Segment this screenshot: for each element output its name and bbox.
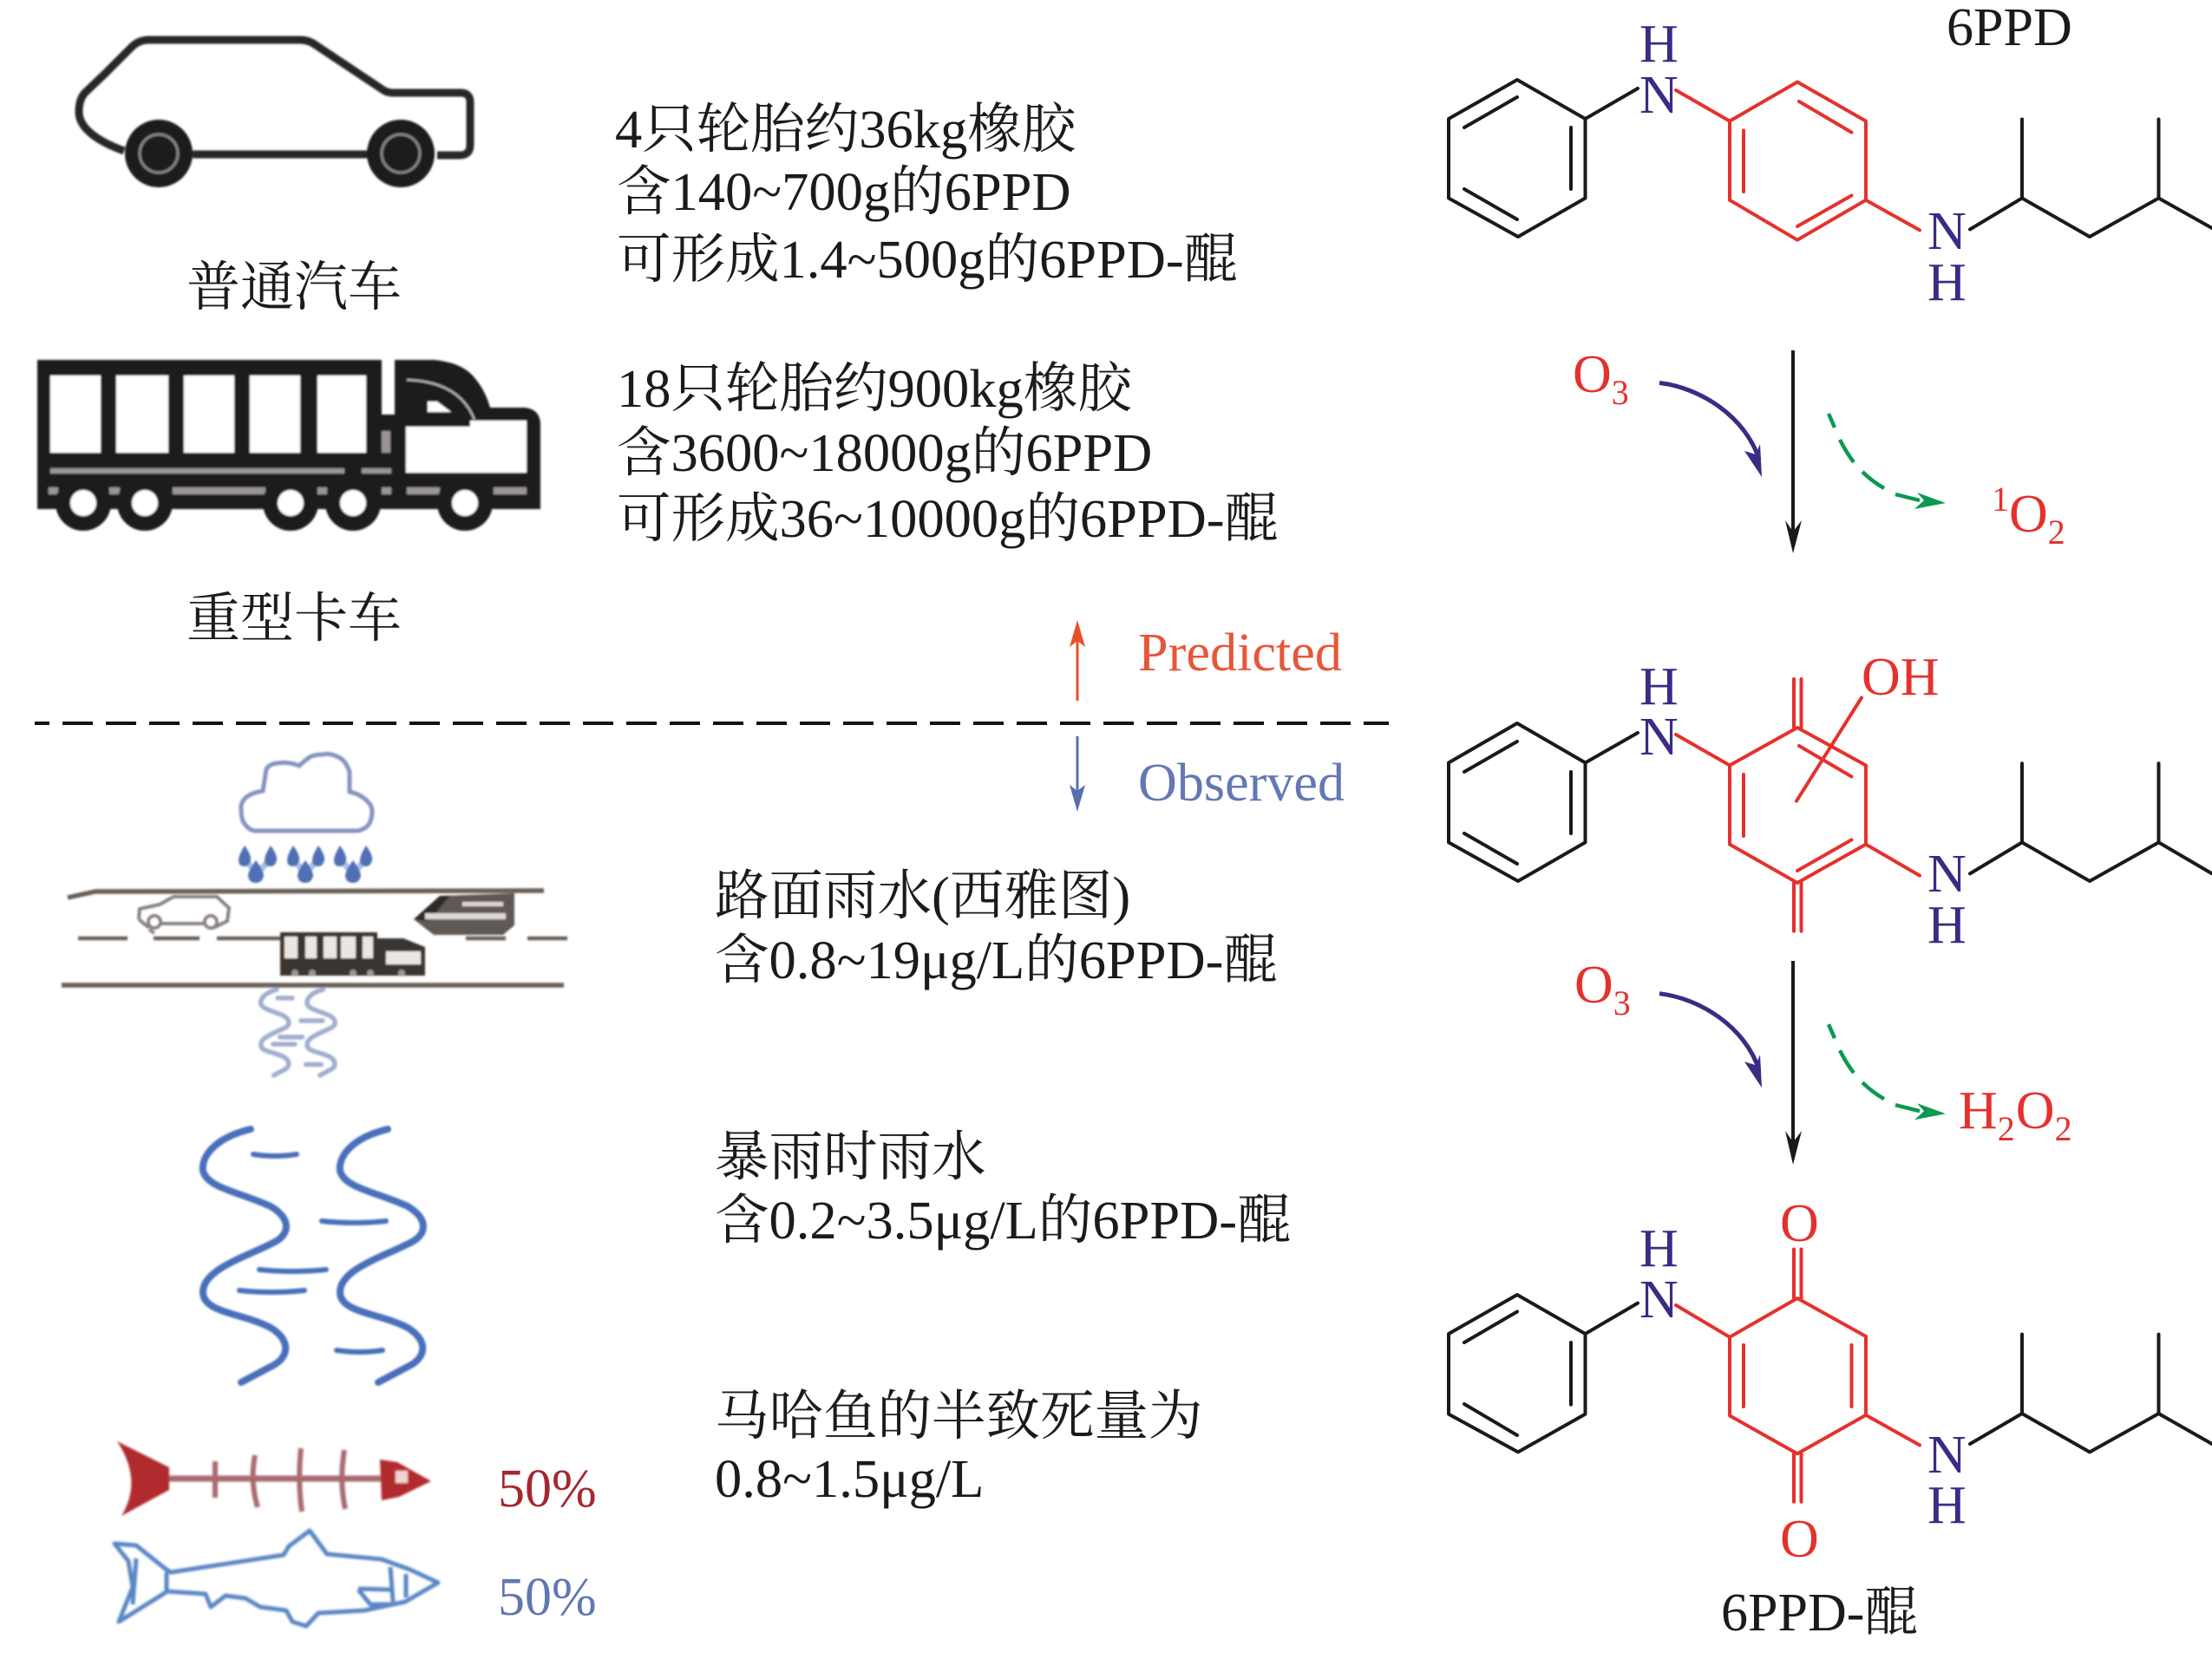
molecule: 6PPD: N — [1639, 66, 1679, 125]
molecule: 6PPD-quinone: H — [1927, 1476, 1967, 1535]
arrow: ozone in — [1659, 994, 1762, 1087]
icon: rain on road with runoff — [62, 754, 567, 1075]
icon: small truck — [280, 932, 425, 976]
icon: rain drops — [239, 846, 372, 883]
text block: truck tyres: 可形成36~10000g的6PPD-醌 — [617, 488, 1279, 549]
icon: stormwater streams — [203, 1129, 423, 1382]
icon: heavy truck — [37, 360, 540, 531]
label: ozone: 3 — [1613, 983, 1631, 1022]
molecule: hydroxylated intermediate: N — [1927, 845, 1967, 904]
text block: storm water: 暴雨时雨水 — [715, 1127, 985, 1187]
arrow: singlet oxygen out — [1829, 414, 1946, 509]
text block: road runoff: 路面雨水(西雅图) — [715, 865, 1130, 926]
label: hydrogen peroxide: H — [1959, 1081, 1998, 1140]
label: ozone: 3 — [1612, 373, 1629, 412]
label: observed: Observed — [1138, 754, 1345, 813]
molecule: hydroxylated intermediate — [1449, 648, 2212, 955]
label: hydroxyl: OH — [1862, 648, 1940, 707]
icon: small SUV — [414, 893, 514, 935]
molecule: 6PPD-quinone: O — [1780, 1194, 1819, 1253]
label: singlet oxygen: 1 — [1992, 480, 2009, 519]
arrow: hydrogen peroxide out — [1829, 1024, 1946, 1120]
icon: cloud — [241, 754, 372, 831]
text block: car tyres — [615, 99, 1238, 290]
molecule: 6PPD-quinone: N — [1927, 1426, 1967, 1485]
label: hydrogen peroxide: 2 — [1998, 1109, 2015, 1148]
molecule: 6PPD-quinone: H — [1639, 1219, 1679, 1278]
molecule: hydroxylated intermediate: H — [1927, 896, 1967, 955]
text block: truck tyres — [617, 358, 1279, 549]
label: singlet oxygen: 2 — [2048, 513, 2065, 552]
text block: car tyres: 含140~700g的6PPD — [617, 161, 1070, 222]
label: singlet oxygen: O — [2009, 485, 2048, 544]
label: heavy truck: 重型卡车 — [187, 590, 402, 649]
label: live percentage: 50% — [498, 1568, 597, 1627]
reaction arrows 1 — [1573, 345, 2065, 553]
text block: LC50 — [715, 1386, 1202, 1509]
molecule: 6PPD: N — [1927, 202, 1967, 261]
molecule: 6PPD: H — [1927, 253, 1967, 312]
arrow: observed — [1070, 736, 1085, 812]
label: hydrogen peroxide: O — [2016, 1081, 2055, 1140]
text block: storm water: 含0.2~3.5μg/L的6PPD-醌 — [715, 1190, 1292, 1251]
icon: small runoff streams — [261, 990, 335, 1075]
text block: truck tyres: 18只轮胎约900kg橡胶 — [617, 358, 1133, 419]
text block: road runoff: 含0.8~19μg/L的6PPD-醌 — [715, 930, 1278, 990]
dashed divider — [35, 722, 1389, 725]
label: dead percentage: 50% — [498, 1460, 597, 1519]
molecule: 6PPD: H — [1639, 15, 1679, 74]
label: ordinary car: 普通汽车 — [187, 258, 402, 317]
arrow: ozone in — [1659, 383, 1762, 477]
label: predicted: Predicted — [1138, 624, 1342, 683]
text block: car tyres: 可形成1.4~500g的6PPD-醌 — [617, 229, 1238, 290]
text block: road runoff — [715, 865, 1278, 990]
icon: dead fish skeleton — [117, 1441, 431, 1516]
molecule: 6PPD-quinone — [1449, 1194, 2212, 1569]
label: ozone: O — [1573, 345, 1612, 404]
icon: small car — [139, 897, 229, 933]
text block: car tyres: 4只轮胎约36kg橡胶 — [615, 99, 1077, 160]
text block: LC50: 马哈鱼的半致死量为 — [715, 1386, 1202, 1447]
label: 6PPD: 6PPD — [1947, 0, 2072, 57]
text block: LC50: 0.8~1.5μg/L — [715, 1448, 984, 1509]
road — [62, 891, 567, 985]
molecule: 6PPD-quinone: O — [1780, 1510, 1819, 1569]
arrow: predicted — [1070, 620, 1085, 701]
molecule: hydroxylated intermediate: H — [1639, 657, 1679, 716]
icon: car — [79, 40, 470, 187]
molecule: 6PPD — [1449, 15, 2212, 312]
molecule: 6PPD-quinone: N — [1639, 1270, 1679, 1329]
label: ozone: O — [1574, 956, 1613, 1015]
arrow: main step — [1785, 350, 1802, 553]
text block: truck tyres: 含3600~18000g的6PPD — [617, 422, 1152, 483]
label: hydrogen peroxide: 2 — [2055, 1109, 2072, 1148]
reaction arrows 2 — [1574, 956, 2072, 1165]
text block: storm water — [715, 1127, 1292, 1251]
molecule: hydroxylated intermediate: N — [1639, 708, 1679, 767]
label: 6PPD-quinone: 6PPD-醌 — [1721, 1584, 1918, 1643]
icon: live fish — [115, 1531, 438, 1626]
arrow: main step — [1785, 961, 1802, 1165]
